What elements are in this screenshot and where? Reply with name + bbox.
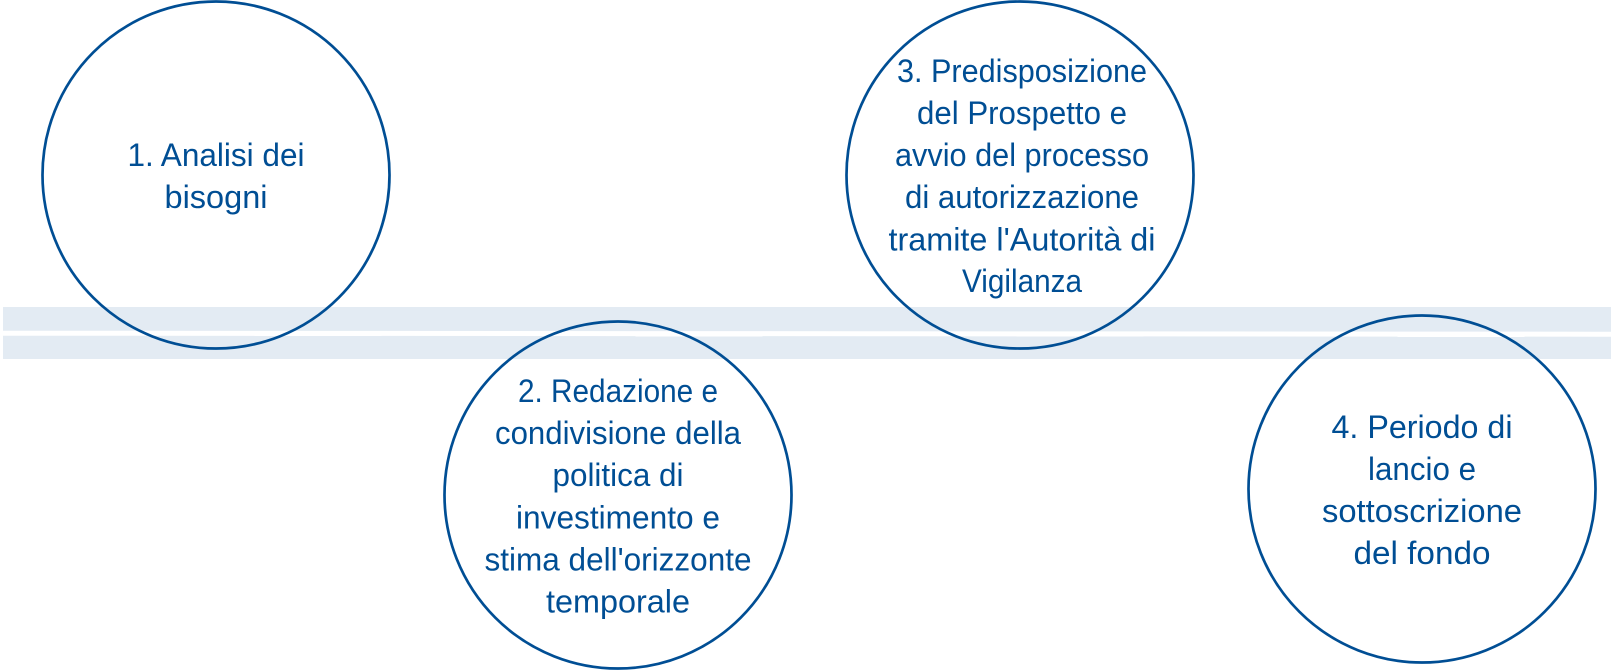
step 3: Predisposizione del Prospetto: del Prospetto e: [917, 95, 1127, 131]
step 2: Redazione e condivisione: temporale: [546, 584, 690, 620]
step 1: Analisi dei bisogni: 1. Analisi dei: [128, 137, 304, 173]
step 2: Redazione e condivisione: condivisione della: [495, 415, 741, 451]
step 3: Predisposizione del Prospetto: Vigilanza: [962, 263, 1082, 299]
step 4: Periodo di lancio e sottoscrizione: sottoscrizione: [1322, 493, 1522, 529]
step 2: Redazione e condivisione: [444, 322, 792, 668]
step 4: Periodo di lancio e sottoscrizione: [1248, 316, 1596, 662]
step 3: Predisposizione del Prospetto: avvio del processo: [895, 137, 1149, 173]
step 2: Redazione e condivisione: investimento e: [516, 500, 720, 536]
step 1: Analisi dei bisogni: bisogni: [164, 179, 268, 215]
step 2: Redazione e condivisione: stima dell'orizzonte: [484, 542, 752, 578]
step 3: Predisposizione del Prospetto: [846, 2, 1194, 348]
step 1: Analisi dei bisogni: [42, 2, 390, 348]
step 2: Redazione e condivisione: politica di: [552, 457, 684, 493]
step 3: Predisposizione del Prospetto: tramite l'Autorità di: [888, 222, 1156, 258]
step 4: Periodo di lancio e sottoscrizione: lancio e: [1368, 451, 1476, 487]
step 3: Predisposizione del Prospetto: di autorizzazione: [905, 179, 1139, 215]
timeline band: [3, 307, 1611, 359]
step 4: Periodo di lancio e sottoscrizione: del fondo: [1354, 535, 1490, 571]
step 3: Predisposizione del Prospetto: 3. Predisposizione: [897, 53, 1147, 89]
step 2: Redazione e condivisione: 2. Redazione e: [518, 373, 718, 409]
step 4: Periodo di lancio e sottoscrizione: 4. Periodo di: [1332, 409, 1512, 445]
